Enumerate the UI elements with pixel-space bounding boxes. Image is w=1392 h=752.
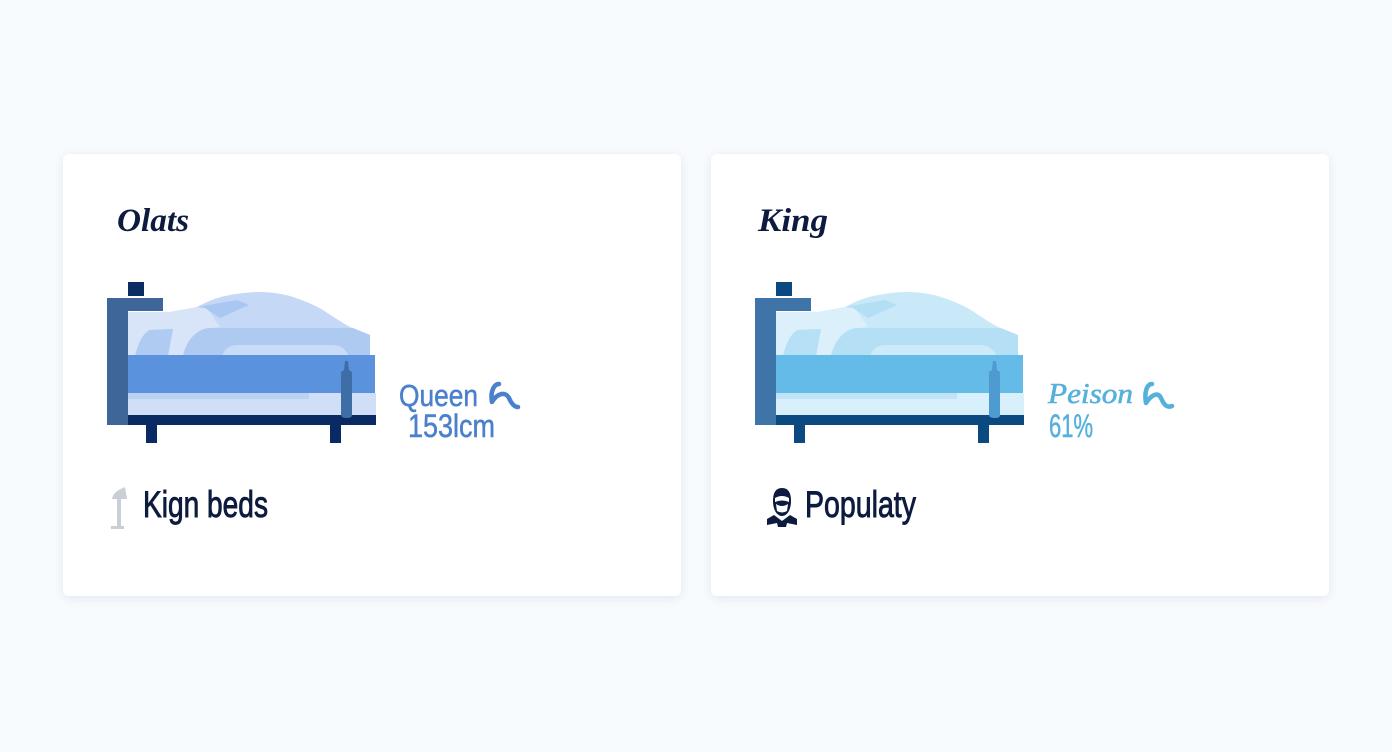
heading: Olats: Olats — [117, 203, 189, 239]
icon: lamp — [111, 487, 127, 529]
illustration: light blue bed — [755, 282, 1024, 443]
right card contents — [755, 203, 1172, 527]
panel: right card — [711, 154, 1329, 596]
panel: left card — [63, 154, 681, 596]
icon: light blue swash — [1145, 384, 1172, 407]
icon: blue swash — [491, 384, 518, 407]
left card contents — [107, 203, 518, 529]
heading: King: King — [757, 203, 828, 239]
icon: person — [767, 488, 797, 527]
label: 61%: 61% — [1049, 408, 1093, 444]
caption: Kign beds: Kign beds — [143, 484, 268, 525]
label: Peison: Peison — [1047, 378, 1133, 410]
label: 153lcm: 153lcm — [408, 408, 495, 444]
label: Queen: Queen — [399, 378, 478, 413]
illustration: blue bed — [107, 282, 376, 443]
caption: Populaty: Populaty — [805, 484, 916, 525]
